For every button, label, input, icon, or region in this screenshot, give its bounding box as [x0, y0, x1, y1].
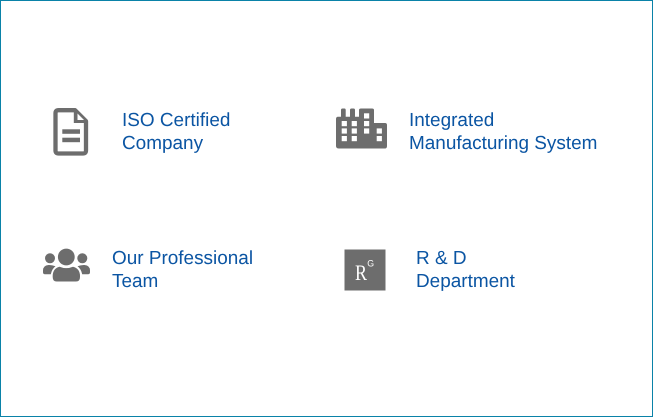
icon: ResearchGate logo: [344, 250, 386, 290]
text: Our Professional Team: Our Professional: [112, 248, 253, 269]
text: ISO Certified Company: [122, 110, 230, 154]
text: R & D Department: R & D: [416, 248, 467, 269]
text: Integrated Manufacturing System: Integrated: [409, 110, 494, 131]
text: R & D Department: [416, 248, 515, 292]
text: Integrated Manufacturing System: [409, 110, 597, 154]
text: Our Professional Team: Team: [112, 271, 158, 292]
text: ISO Certified Company: ISO Certified: [122, 110, 230, 131]
icon: ResearchGate logo: R: [355, 260, 367, 285]
icon: document: [56, 110, 86, 154]
text: ISO Certified Company: Company: [122, 133, 203, 154]
text: Our Professional Team: [112, 248, 253, 292]
icon: factory: [336, 108, 387, 148]
icon: ResearchGate logo: G: [367, 258, 374, 268]
text: Integrated Manufacturing System: Manufacturing System: [409, 133, 597, 154]
text: R & D Department: Department: [416, 271, 515, 292]
icon: team: [43, 249, 90, 282]
